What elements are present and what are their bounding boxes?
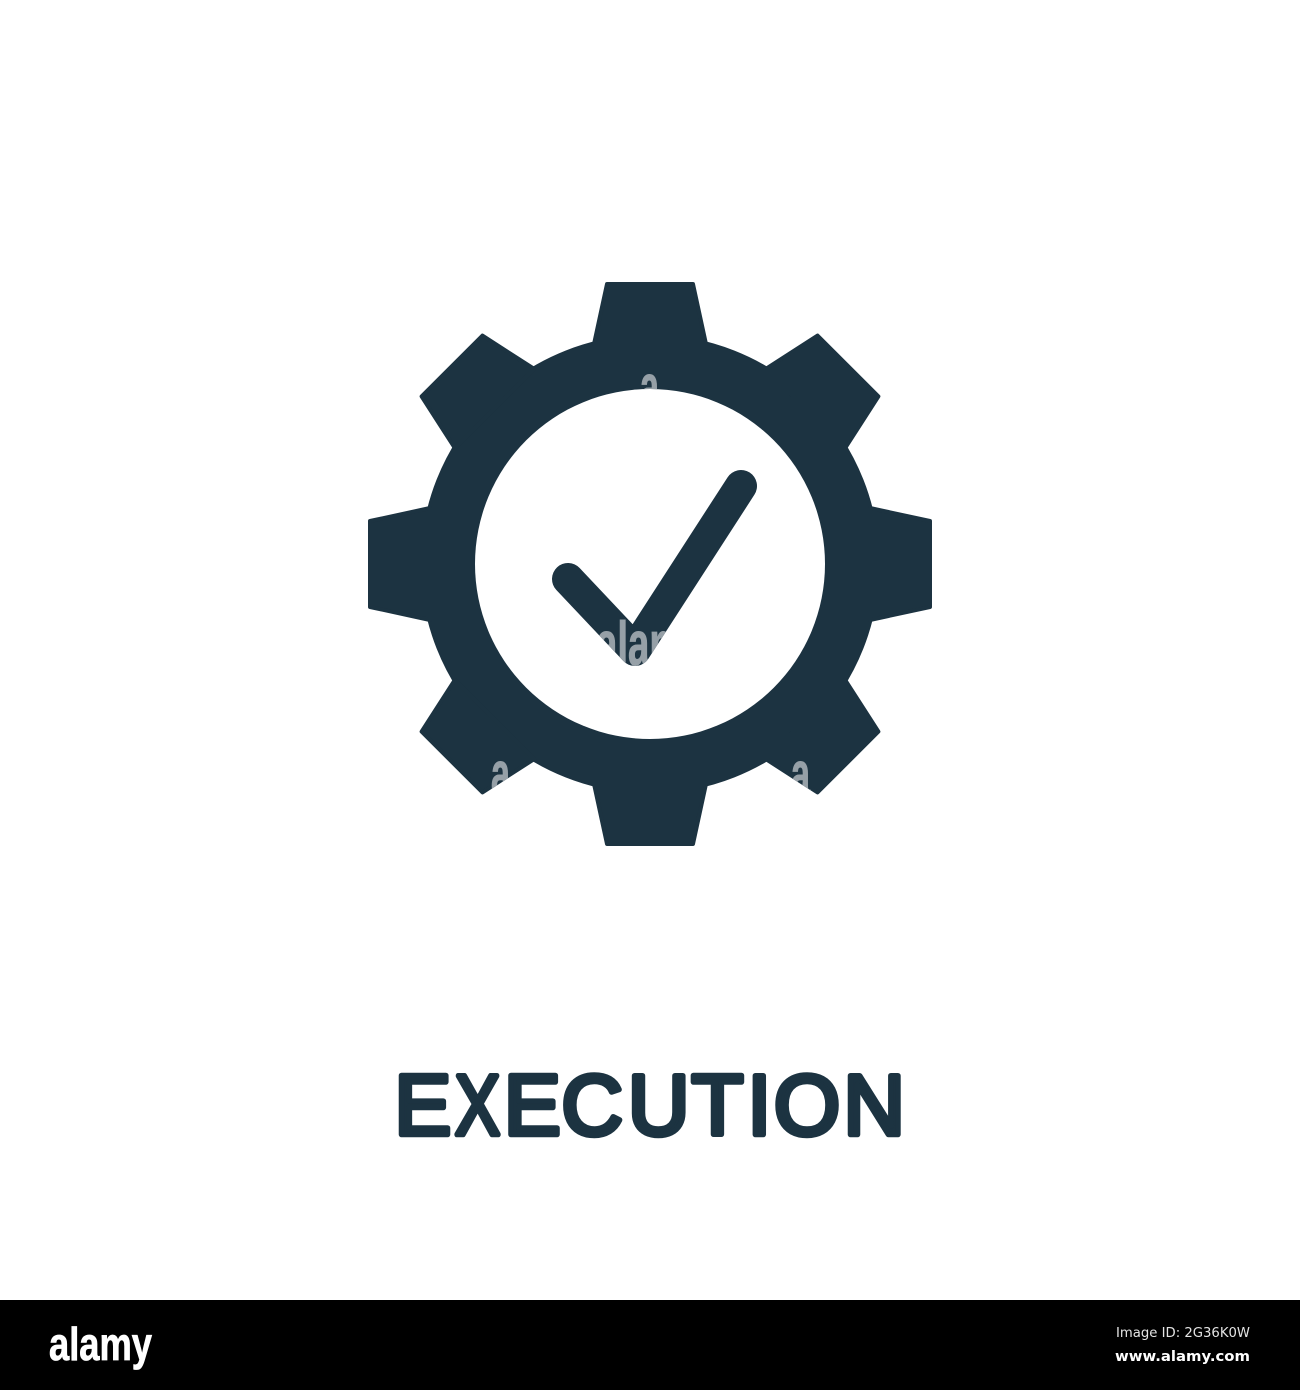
title: E [394,1058,451,1153]
watermark letters over icon: a [640,353,659,422]
image id: Image ID: 2G36K0W [1116,1325,1250,1341]
alamy logo: alamy [49,1318,152,1370]
title: N [844,1058,905,1153]
watermark letters over icon [491,353,810,809]
title: C [562,1058,623,1153]
watermark letters over icon: a [491,740,510,809]
gear inner circle [475,389,825,739]
watermark letters over icon: a [791,740,810,809]
title: O [774,1058,840,1153]
website: www.alamy.com [1115,1349,1250,1365]
watermark letters over icon: alamy [596,610,705,679]
title: U [628,1058,689,1153]
title: T [692,1058,743,1153]
title: X [455,1058,500,1153]
gear [370,284,930,844]
check mark [568,486,741,650]
title: E [504,1058,561,1153]
title: I [748,1058,771,1153]
footer bar [0,1300,1300,1390]
icon: gear with check mark [370,284,930,844]
